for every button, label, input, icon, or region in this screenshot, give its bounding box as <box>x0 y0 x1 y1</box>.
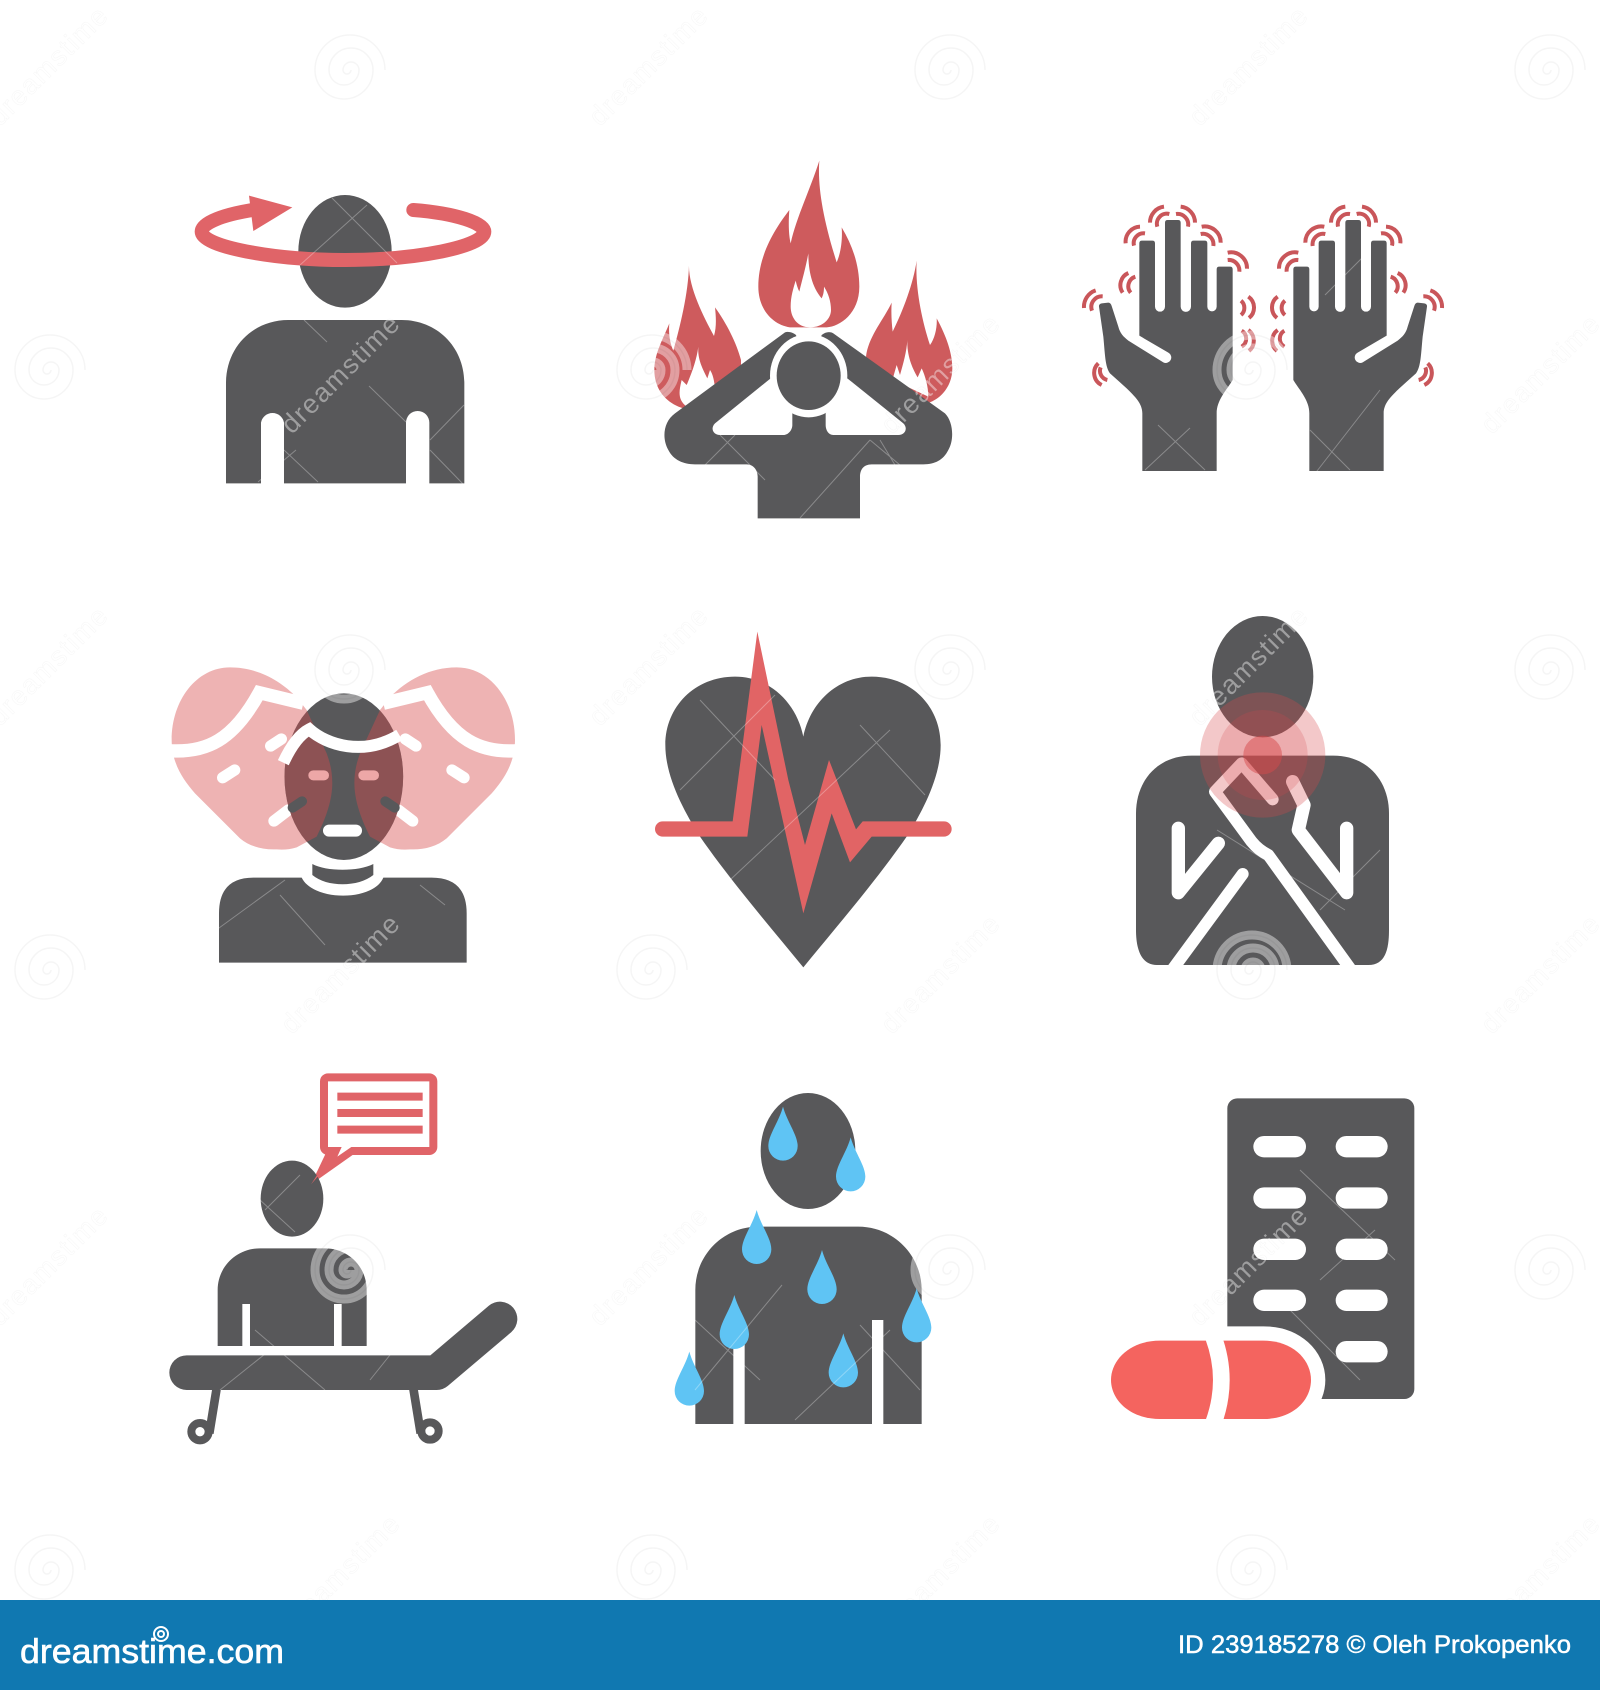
torso <box>218 1248 367 1346</box>
left flame core <box>680 347 715 407</box>
watermark text marks: dreamstime <box>1183 600 1314 731</box>
watermark text marks: dreamstime <box>1183 0 1314 131</box>
lower arm line <box>1173 874 1243 968</box>
heart <box>665 677 941 967</box>
bubble tail red join <box>327 1147 354 1155</box>
watermark text marks: dreamstime <box>875 908 1006 1039</box>
head <box>1212 616 1313 737</box>
right mask <box>354 667 515 850</box>
face eyes <box>313 760 374 790</box>
footer background <box>0 1600 1600 1690</box>
pain target <box>1200 692 1325 818</box>
watermark text marks: dreamstime <box>275 308 406 439</box>
image id and author: ID 239185278 © Oleh Prokopenko <box>1178 1631 1571 1659</box>
logo text: dreamstime.com <box>20 1633 284 1671</box>
bubble tail notch <box>337 1147 351 1157</box>
centre flame <box>758 161 859 327</box>
icon: sweating person <box>675 1093 931 1424</box>
face mouth <box>329 813 356 849</box>
right hand <box>1272 207 1442 471</box>
centre flame core <box>791 253 831 327</box>
mask overlap on face <box>284 710 404 842</box>
icon: trembling hands <box>1084 207 1442 471</box>
head <box>761 1093 855 1209</box>
head halo <box>770 334 847 417</box>
capsule halo <box>1111 1341 1311 1419</box>
blister cavities <box>1253 1136 1388 1362</box>
mask brow bands <box>168 693 518 751</box>
left arm outline <box>1178 828 1218 893</box>
arm gap right <box>826 378 906 435</box>
footer bar <box>0 1600 1600 1690</box>
icon: pills <box>1111 1098 1414 1423</box>
speech bubble <box>311 1077 433 1184</box>
torso <box>219 878 467 963</box>
watermark text marks: dreamstime <box>875 1508 1006 1639</box>
watermark text marks: dreamstime <box>1183 1200 1314 1331</box>
watermark text marks: dreamstime <box>275 1508 406 1639</box>
couch legs <box>209 1388 421 1433</box>
rotation arrow <box>202 196 484 260</box>
icon: patient on couch <box>187 1077 500 1440</box>
head <box>261 1161 323 1237</box>
couch wheels <box>191 1422 439 1440</box>
hand outline <box>1215 763 1350 968</box>
blister pack <box>1227 1098 1414 1399</box>
mask eyes and mouths <box>223 739 464 821</box>
icon: heart with pulse <box>655 632 952 967</box>
left mask <box>172 667 332 850</box>
tremor marks <box>1084 207 1254 385</box>
capsule <box>1111 1341 1311 1419</box>
bubble frame <box>324 1077 433 1151</box>
tremor marks <box>1272 207 1442 385</box>
neck <box>312 864 373 884</box>
right flame core <box>893 340 928 397</box>
watermark text marks: dreamstime <box>583 600 714 731</box>
logo spiral <box>154 1627 168 1641</box>
head <box>298 195 392 308</box>
torso <box>226 320 464 483</box>
arm gap left <box>713 378 792 435</box>
sweat drops <box>675 1107 931 1406</box>
icon: mood swings masks <box>168 667 518 963</box>
bubble lines <box>337 1097 423 1130</box>
tail tip over head <box>311 1168 325 1184</box>
arms and torso <box>664 332 952 518</box>
icon: throat pain <box>1136 616 1389 968</box>
palm and fingers <box>1099 220 1233 471</box>
bubble tail <box>311 1150 354 1184</box>
watermark text marks: dreamstime <box>583 1200 714 1331</box>
right arm outline <box>1293 782 1347 893</box>
watermark text marks: dreamstime <box>275 908 406 1039</box>
head <box>284 693 403 860</box>
torso <box>1136 756 1389 965</box>
mask mouth holes on face <box>293 801 395 808</box>
watermark lines <box>175 198 1395 1420</box>
palm and fingers <box>1293 220 1427 471</box>
torso <box>695 1227 922 1424</box>
pulse line <box>655 632 952 913</box>
watermark text marks: dreamstime <box>583 0 714 131</box>
icon: burning head <box>654 161 952 518</box>
capsule divider <box>1213 1337 1221 1423</box>
couch <box>187 1319 500 1373</box>
icon: dizziness <box>202 195 484 483</box>
forehead band <box>283 729 399 763</box>
left hand <box>1084 207 1254 471</box>
left flame <box>654 265 741 408</box>
head <box>777 341 841 410</box>
watermark text marks: dreamstime <box>875 308 1006 439</box>
right flame <box>866 261 952 403</box>
